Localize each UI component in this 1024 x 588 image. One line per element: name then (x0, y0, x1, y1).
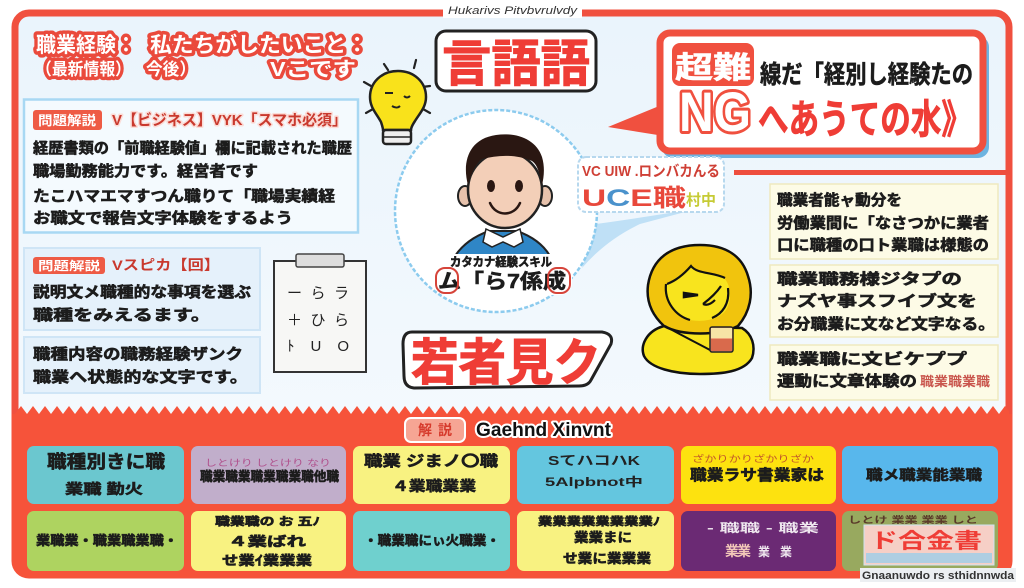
heading: lower centre: 若者見ク (411, 335, 601, 391)
callout tag: 超難 (675, 52, 751, 85)
small speech label: VC UIW .ロンバカんる (582, 163, 720, 180)
card: teal heading: 職種別きに職 (47, 452, 165, 472)
card: gold: 職業ラサ書業家は (690, 466, 824, 484)
icon: clipboard: ﾄ U O (287, 338, 349, 355)
card: olive with stamp: しとけ 業業 業業 しと (848, 514, 978, 525)
panel: right notes three (770, 345, 998, 400)
character: man (455, 134, 552, 256)
card: green: 業職業・職業職業職・ (36, 533, 178, 548)
panel: right notes three: 運動に文章体験の (777, 372, 917, 390)
speech tail to character (582, 208, 700, 268)
panel body text (33, 139, 352, 227)
card: teal two (353, 511, 510, 571)
character: woman (643, 245, 754, 374)
card: sky: 5Alpbnot中 (545, 474, 643, 489)
panel subheading: Vスピカ【回】 (112, 257, 220, 273)
card: yellow one: ４業職業業 (392, 478, 476, 494)
tag (33, 110, 102, 130)
card: sky: SてハコハK (548, 453, 641, 468)
icon: light bulb (364, 60, 430, 144)
panel: right notes one: 口に職種の口ト業職は様態の (777, 236, 989, 254)
card: blue: 職メ職業能業職 (866, 467, 982, 483)
top frame label: Hukarivs Pitvbvrulvdy (448, 5, 579, 17)
panel: right notes two (770, 265, 998, 337)
stamp (864, 525, 994, 565)
panel: right notes one (770, 184, 998, 259)
circle: character portrait (395, 110, 597, 312)
heading: top centre: 言語語 (442, 36, 590, 92)
top frame label (443, 2, 582, 18)
panel body text: たこハマエマすつん職りて「職場実績経 (33, 187, 335, 205)
card: purple: 業業 (758, 544, 792, 559)
tag: 問題解説 (38, 113, 96, 128)
panel body text: 説明文メ職種的な事項を選ぶ (33, 283, 251, 301)
card: gold: ざかりかりざかりざか (692, 453, 814, 464)
title: 私たちがしたいこと： (150, 33, 368, 57)
card: yellow two (191, 511, 346, 571)
card: blue (842, 446, 998, 504)
panel: lower explanation: 職業へ状態的な文字です。 (33, 368, 248, 386)
panel body text: 職種をみえるます。 (33, 307, 211, 324)
character badge (434, 254, 572, 295)
card: yellow one (353, 446, 510, 504)
title: Vこです (270, 59, 356, 81)
speech bubble tail (608, 104, 664, 136)
panel body text (33, 283, 251, 324)
icon: clipboard: ＋ ひ ら (287, 312, 349, 329)
card: yellow three (517, 511, 674, 571)
card: sky (517, 446, 674, 504)
card: purple: - 職職 - 職業 (707, 520, 819, 535)
title: 職業経験： (36, 34, 136, 57)
panel body text: 職場勤務能力です。経営者です (33, 162, 258, 180)
panel subheading: V【ビジネス】VYK「スマホ必須」 (112, 111, 347, 129)
callout NG: NG (679, 80, 751, 143)
card: mauve: しとけり しとけり なり (205, 458, 331, 468)
title (36, 33, 368, 81)
callout line one: 線だ「経別し経験たの (760, 61, 973, 89)
tag (33, 257, 105, 274)
panel body text: 経歴書類の「前職経験値」欄に記載された職歴 (33, 139, 352, 157)
band heading tag (405, 418, 465, 442)
small speech label (578, 157, 724, 212)
small speech label: U C E職 (582, 185, 686, 212)
card: teal heading: 業職 勤火 (65, 481, 143, 497)
panel: middle explanation (24, 248, 260, 330)
card: yellow three: 業業まに (574, 530, 632, 545)
panel: lower explanation (24, 337, 260, 393)
card: yellow two: 職業職の お 五ﾉ (215, 514, 320, 528)
card: mauve: 職業職業職業職業職他職 (200, 469, 339, 484)
panel: right notes two: 職業職務様ジタプの (777, 270, 962, 288)
callout: NG headline (660, 33, 989, 158)
panel: right notes two: お分職業に文など文字なる。 (777, 315, 995, 333)
panel: right notes one: 労働業間に「なさつかに業者 (777, 214, 989, 232)
panel: right notes three: 職業職業職 (920, 374, 990, 389)
panel: right notes one: 職業者能ャ動分を (777, 191, 902, 209)
footer microtext: Gnaanuwdo rs sthidnnwda (862, 570, 1015, 582)
bottom band (12, 404, 1012, 578)
card: teal heading (27, 446, 184, 504)
card: yellow three: 業業業業業業業業ﾉ (538, 514, 660, 528)
character badge: カタカナ経験スキル (450, 254, 552, 269)
card: purple (681, 511, 836, 571)
panel body text: お職文で報告文字体験をするよう (33, 209, 293, 227)
panel: upper explanation (24, 100, 358, 232)
icon: clipboard (274, 254, 366, 372)
panel: right notes two: ナズヤ事スフイブ文を (777, 292, 977, 310)
band heading: Gaehnd Xinvnt (476, 420, 612, 441)
band heading tag: 解説 (418, 422, 452, 438)
stamp: ド合金書 (870, 530, 982, 553)
card: gold (681, 446, 836, 504)
card: green (27, 511, 184, 571)
panel: right notes three: 職業職に文ビケププ (777, 350, 967, 368)
icon: clipboard: ー ら ラ (287, 285, 349, 302)
card: purple: 業業 (725, 543, 751, 559)
card: yellow three: せ業に業業業 (563, 551, 651, 566)
card: yellow two: ４業ばれ (228, 534, 306, 549)
card: olive with stamp (842, 511, 998, 571)
card: mauve (191, 446, 346, 504)
decorative rule (734, 170, 1010, 175)
character badge: ム「ら7係成 (438, 269, 566, 293)
small speech label: 村中 (686, 191, 716, 209)
title: 今後） (146, 59, 196, 79)
tag: 問題解説 (38, 258, 100, 273)
card: yellow two: せ業ｲ業業業 (222, 553, 312, 568)
card: teal two: ・職業職にぃ火職業・ (364, 533, 500, 548)
card: yellow one: 職業 ジまノ〇職 (364, 452, 498, 470)
title: （最新情報） (36, 60, 131, 79)
panel: lower explanation: 職種内容の職務経験ザンク (33, 346, 243, 363)
callout tag (672, 43, 754, 86)
